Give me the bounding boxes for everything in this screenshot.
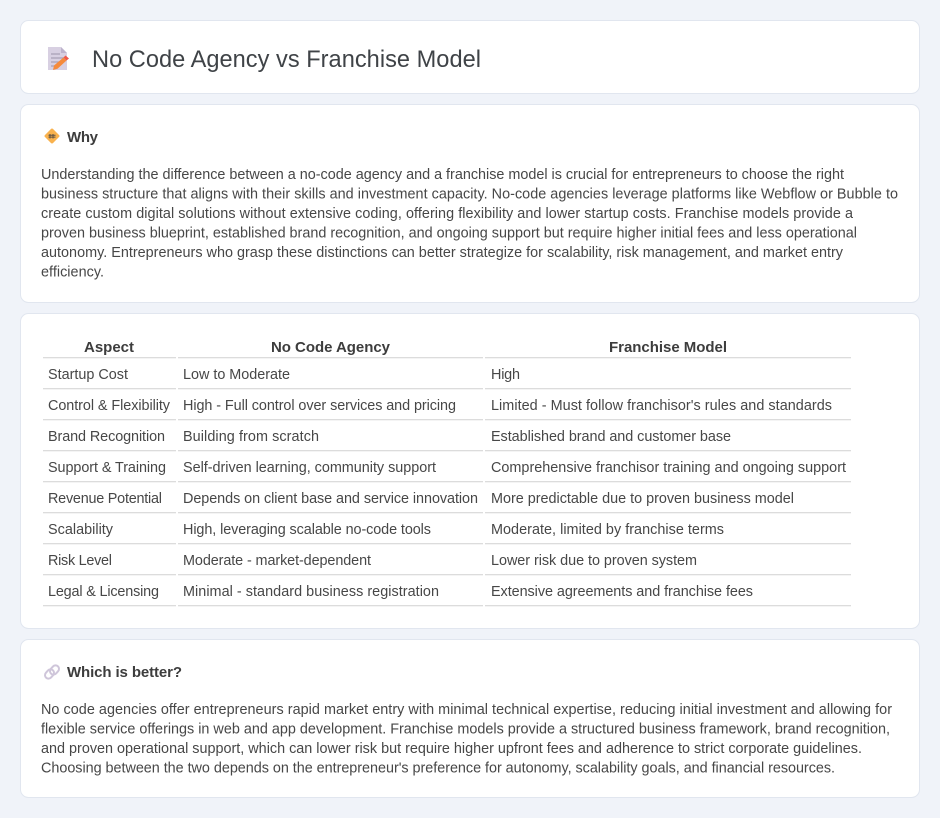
text block: why paragraph: proven business blueprint, established brand recognition, and ongoing support but require higher initial fees and less operational — [41, 226, 857, 242]
table row: startup cost: Low to Moderate — [183, 367, 290, 383]
table row: startup cost: High — [491, 367, 520, 383]
text block: which is better paragraph: and proven operational support, which can lower risk but require higher upfront fees and adherence to strict corporate guidelines. — [41, 741, 862, 757]
text block: why paragraph: business structure that aligns with their skills and investment capacity. No-code agencies leverage platforms like Webflow or Bubble to — [41, 186, 898, 202]
table header row — [43, 339, 851, 358]
text block: why paragraph — [41, 167, 898, 280]
heading: why: Why — [67, 129, 99, 146]
table row: control and flexibility: High - Full control over services and pricing — [183, 398, 456, 414]
table row: scalability — [43, 522, 851, 544]
text block: which is better paragraph — [41, 702, 892, 776]
table row: brand recognition: Established brand and customer base — [491, 429, 731, 445]
text block: which is better paragraph: Choosing between the two depends on the entrepreneur's preference for autonomy, scalability goals, and financial resources. — [41, 760, 835, 776]
table row: brand recognition: Brand Recognition — [48, 429, 165, 445]
table row: startup cost — [43, 367, 851, 389]
table row: support and training: Self-driven learning, community support — [183, 460, 436, 476]
table row: risk level: Moderate - market-dependent — [183, 553, 371, 569]
table header row: Aspect — [84, 339, 134, 356]
table row: support and training — [43, 460, 851, 482]
table row: revenue potential — [43, 491, 851, 513]
table row: revenue potential: Depends on client base and service innovation — [183, 491, 478, 507]
text block: which is better paragraph: No code agencies offer entrepreneurs rapid market entry with minimal technical expertise, reducing initial investment and allowing for — [41, 702, 892, 718]
table row: control and flexibility: Limited - Must follow franchisor's rules and standards — [491, 398, 832, 414]
table row: risk level: Lower risk due to proven system — [491, 553, 697, 569]
table header row: Franchise Model — [609, 339, 727, 356]
panel: header — [20, 20, 920, 94]
table row: risk level — [43, 553, 851, 575]
table row: startup cost: Startup Cost — [48, 367, 128, 383]
table row: support and training: Comprehensive franchisor training and ongoing support — [491, 460, 846, 476]
text block: why paragraph: autonomy. Entrepreneurs who grasp these distinctions can better strategize for scalability, risk management, and market entry — [41, 245, 844, 261]
table row: control and flexibility — [43, 398, 851, 420]
heading: which is better: Which is better? — [67, 664, 182, 681]
table row: revenue potential: Revenue Potential — [48, 491, 162, 507]
table header row: No Code Agency — [271, 339, 391, 356]
table row: support and training: Support & Training — [48, 460, 166, 476]
table row: legal and licensing: Minimal - standard business registration — [183, 584, 439, 600]
table row: legal and licensing: Extensive agreements and franchise fees — [491, 584, 753, 600]
table row: legal and licensing — [43, 584, 851, 606]
title: No Code Agency vs Franchise Model — [92, 47, 481, 73]
text block: why paragraph: create custom digital solutions without extensive coding, offering flexibility and lower startup costs. Franchise models provide a — [41, 206, 853, 222]
text block: why paragraph: efficiency. — [41, 264, 104, 280]
panel: which is better — [20, 640, 920, 798]
table row: brand recognition — [43, 429, 851, 451]
table row: risk level: Risk Level — [48, 553, 112, 569]
table row: legal and licensing: Legal & Licensing — [48, 584, 159, 600]
table row: brand recognition: Building from scratch — [183, 429, 319, 445]
text block: which is better paragraph: flexible service offerings in web and app development. Franchise models provide a structured business framework, brand recognition, — [41, 722, 890, 738]
icon: document with pencil — [48, 47, 69, 70]
icon: orange diamond — [44, 128, 60, 144]
panel: why — [20, 104, 920, 302]
table row: revenue potential: More predictable due to proven business model — [491, 491, 794, 507]
panel: comparison table — [20, 314, 920, 628]
table row: control and flexibility: Control & Flexibility — [48, 398, 171, 414]
table row: scalability: Moderate, limited by franchise terms — [491, 522, 724, 538]
icon: chain link — [44, 664, 60, 680]
table row: scalability: Scalability — [48, 522, 114, 538]
text block: why paragraph: Understanding the difference between a no-code agency and a franchise model is crucial for entrepreneurs to choose the right — [41, 167, 844, 183]
table row: scalability: High, leveraging scalable no-code tools — [183, 522, 431, 538]
